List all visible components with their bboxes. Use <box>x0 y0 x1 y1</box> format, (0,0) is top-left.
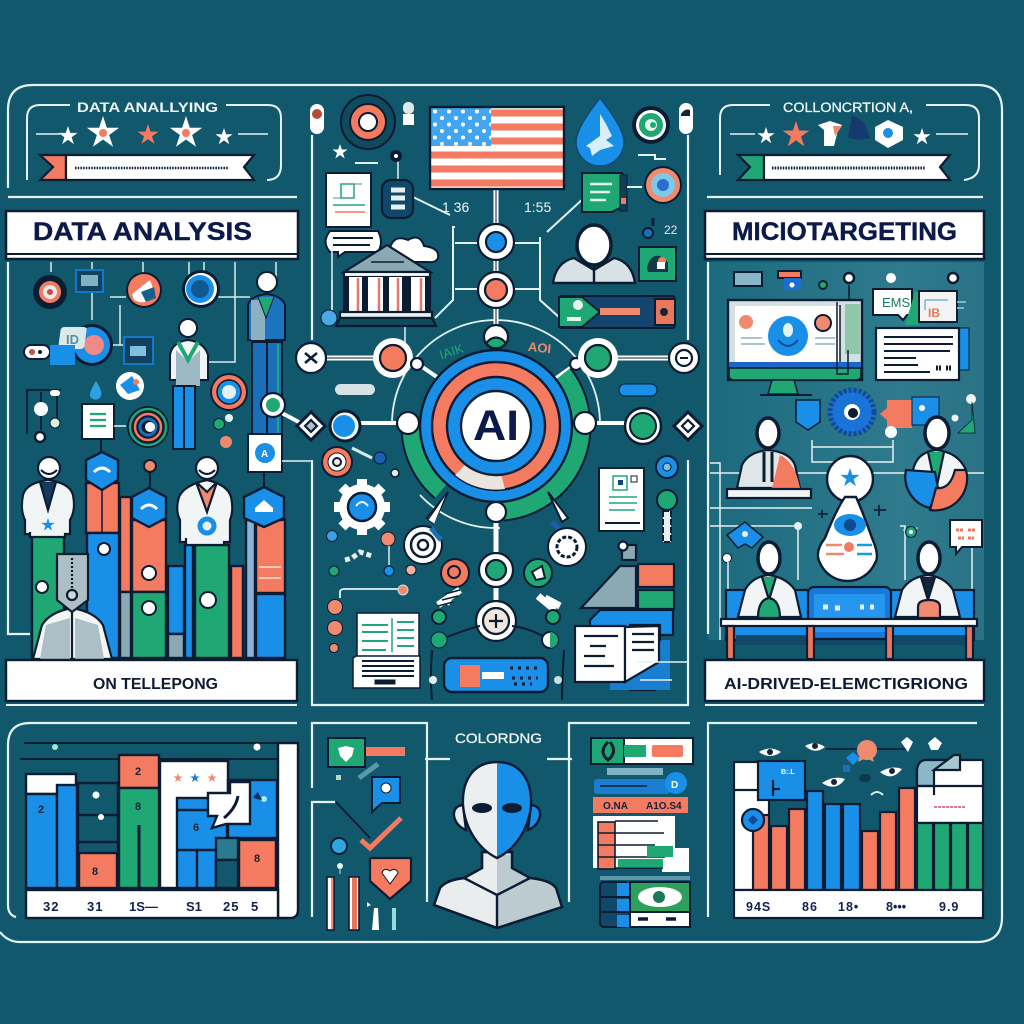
coral bars 2 <box>862 831 878 890</box>
ears <box>454 805 466 830</box>
icon: coral disc <box>126 272 162 308</box>
header frame <box>720 105 979 180</box>
chart stars <box>173 773 267 802</box>
icon: EMS bubble <box>873 289 919 325</box>
icon: A box <box>248 434 312 472</box>
label: AI-DRIVED-ELEMCTIGRIONG <box>705 660 984 705</box>
icon: slider row <box>594 768 687 794</box>
icon: puzzle block <box>880 397 939 438</box>
icon: green money tag <box>591 738 693 764</box>
icon: green photo <box>639 247 676 281</box>
panel: right microtargeting tinted background <box>708 262 984 640</box>
chart label strip <box>26 890 278 918</box>
icon: report document <box>353 613 420 688</box>
header title: DATA ANALLYING <box>77 100 218 115</box>
label: ON TELLEPONG: ON TELLEPONG <box>93 676 218 693</box>
icon: star balloon <box>827 456 873 502</box>
icon: eye ring <box>341 95 395 149</box>
chart glyphs: 6 <box>193 822 199 834</box>
shoulders <box>434 852 562 928</box>
icon: dash <box>638 155 666 159</box>
seated person right <box>895 542 960 618</box>
icon: screen <box>124 337 153 364</box>
white right column <box>278 743 298 918</box>
hub green ring <box>411 374 581 511</box>
title: DATA ANALYSIS: DATA ANALYSIS <box>33 218 252 246</box>
title: MICIOTARGETING: MICIOTARGETING <box>732 218 957 246</box>
eyes <box>472 803 492 813</box>
table with seated people <box>721 542 977 659</box>
pills by hub <box>335 384 657 396</box>
figure: person with pie <box>905 417 967 510</box>
icon: blue gear <box>830 390 874 434</box>
title: MICIOTARGETING <box>705 211 984 259</box>
icon: callout and cloud <box>326 231 438 262</box>
icon: target <box>33 275 67 309</box>
bar chart: bottom left: 1S— <box>129 899 158 914</box>
icon: right pill <box>679 103 693 134</box>
blue sign: B:.L <box>781 769 795 776</box>
bar chart: bottom left: 32 <box>43 899 59 914</box>
chart glyphs: 2 <box>135 766 141 778</box>
figure: AI head bust <box>434 762 562 928</box>
chart glyphs <box>38 766 260 878</box>
icon: blue ball <box>321 235 337 326</box>
white left column <box>734 762 769 890</box>
icon: list table <box>593 816 689 872</box>
label: ON TELLEPONG <box>6 660 297 705</box>
node icons row 2 <box>297 408 702 444</box>
icon: dot and label 22: 22 <box>664 223 678 237</box>
header ribbon <box>738 155 950 180</box>
bar chart: bottom right: 86 <box>802 900 818 914</box>
icon: tablet <box>58 327 87 349</box>
icon: blue disc <box>182 270 220 308</box>
icon: spiral <box>127 406 169 448</box>
icon: thin bars <box>327 877 394 930</box>
icon: blue tag lower <box>722 522 763 590</box>
bar chart: bottom right: 9.9 <box>939 900 959 914</box>
connector: bracket to device <box>429 626 564 700</box>
panel: centre network <box>296 95 702 700</box>
icon: top small tiles <box>734 271 827 290</box>
chart glyphs: 8 <box>135 801 141 813</box>
label: time left: 1 36 <box>442 199 469 215</box>
bar chart: bottom right <box>734 737 983 918</box>
label: arc text left: IAIK <box>437 340 466 362</box>
icon: small pin <box>337 863 343 874</box>
figure: scientist left <box>22 457 74 537</box>
chart top lines <box>20 743 278 759</box>
icon: chat bubble <box>24 345 75 365</box>
seat backs <box>726 590 974 645</box>
icon: coral dots and lead <box>328 585 408 652</box>
bar chart: bottom left <box>20 743 298 918</box>
seated person left <box>738 542 801 618</box>
icon: small dots <box>214 414 233 448</box>
bar chart: left figures and columns <box>32 440 285 658</box>
blue bars <box>807 791 823 890</box>
icon: scattered dots <box>326 530 416 576</box>
figure: bust outline <box>553 225 635 283</box>
icon: arrow bar <box>559 296 675 328</box>
icon: tablet: ID <box>66 332 79 347</box>
icon: blue map pin bubble <box>372 777 400 812</box>
icon: small speech card <box>950 520 982 554</box>
heading: COLORDNG <box>455 731 542 746</box>
floating eye icons <box>759 737 942 795</box>
figure: standing man blue <box>248 272 285 449</box>
panel: right header banner <box>720 100 979 180</box>
blue sign <box>758 761 805 800</box>
icon: stacked house chart <box>575 542 688 690</box>
panel: data analysis icons <box>24 262 312 472</box>
header stars <box>36 116 268 147</box>
icon: blue device <box>444 658 548 692</box>
header ribbon <box>40 155 254 180</box>
icon: water drop <box>576 98 624 166</box>
icon: capitol temple <box>336 245 436 326</box>
icon: small pill <box>403 102 414 125</box>
icon: star and dash <box>332 144 378 163</box>
icon: device <box>76 270 103 292</box>
table legs <box>727 626 973 659</box>
icon: coral pin <box>432 559 469 624</box>
node: target lower <box>476 601 516 641</box>
panel: microtargeting icons <box>710 271 984 659</box>
panel: left header banner <box>27 100 281 180</box>
screen centre <box>808 587 891 639</box>
chart hexagons <box>86 440 284 527</box>
icon: dot and label 22 <box>643 218 678 238</box>
figure: scientist center <box>177 457 232 545</box>
icon: slider row: D <box>671 780 678 791</box>
bar chart: bottom left: 31 <box>87 899 103 914</box>
bar chart: bottom left: 25 <box>223 899 239 914</box>
icon: top-left pill <box>310 104 324 134</box>
header stars <box>730 115 968 148</box>
face <box>463 762 497 858</box>
label: coral strip: A1O.S4 <box>646 801 682 812</box>
icon: IPB card <box>919 291 966 322</box>
icon: pen right <box>548 492 586 566</box>
nodes on spine <box>478 224 514 349</box>
figure: standing man <box>170 319 208 449</box>
icon: check mark <box>336 802 401 848</box>
label: time right: 1:55 <box>524 199 551 215</box>
icon: green target <box>632 106 670 144</box>
node: white lower <box>486 502 506 522</box>
icon: top node <box>794 522 918 538</box>
icon: green chat <box>582 173 627 212</box>
chart label strip <box>734 890 983 918</box>
icon: panel dots <box>844 273 958 300</box>
icon: money block <box>600 876 690 927</box>
icon: swirl <box>71 324 113 366</box>
chart glyphs: 2 <box>38 804 44 816</box>
title: DATA ANALYSIS <box>6 211 298 259</box>
icon: node dot and server <box>382 150 413 218</box>
node: green lower <box>479 553 513 587</box>
label: AI-DRIVED-ELEMCTIGRIONG: AI-DRIVED-ELEMCTIGRIONG <box>724 676 968 693</box>
coral bars <box>753 815 769 890</box>
icon: pen left <box>404 492 448 564</box>
icon: blue dot and green stack <box>656 456 678 542</box>
figure: podium speaker <box>727 418 811 498</box>
centre AI hub <box>411 350 581 511</box>
bar chart: bottom left: S1 <box>186 899 202 914</box>
icon: blueprint doc <box>326 173 371 227</box>
icon: IPB card: IB <box>928 306 940 320</box>
icon: EMS bubble: EMS <box>882 295 910 310</box>
icon: right document <box>599 468 644 531</box>
icon: droplet robot <box>818 497 886 581</box>
chart dots <box>36 460 216 615</box>
icon: coral target right <box>627 166 682 204</box>
panel: coloring centre bottom <box>327 731 693 930</box>
icon: text card <box>876 328 969 380</box>
label: coral strip <box>593 797 688 813</box>
icon: gear badge <box>116 372 144 400</box>
icon: white gear <box>334 479 390 535</box>
icon: blue ball <box>331 838 347 854</box>
bar chart: bottom right: 94S <box>746 900 771 914</box>
connector lines <box>332 197 600 528</box>
bar chart: bottom right: 18• <box>838 900 859 914</box>
icon: flag <box>430 107 564 189</box>
label: arc text right: AOI <box>527 339 552 356</box>
node: white green <box>261 393 310 428</box>
icon: small green bar and dots <box>952 394 976 433</box>
header title: COLLONCRTION A, <box>783 100 913 115</box>
bar chart: bottom left: 5 <box>251 899 258 914</box>
icon: monitor <box>728 300 862 395</box>
green bars and paper <box>917 755 983 890</box>
icon: bracket with circles <box>27 390 61 442</box>
chart callout <box>208 782 250 828</box>
ring side lines <box>316 358 680 423</box>
icon: drop <box>90 381 101 400</box>
header frame <box>27 105 281 180</box>
icon: green pin <box>524 559 560 624</box>
chart glyphs: 8 <box>254 853 260 865</box>
blue badge <box>742 809 764 831</box>
icon: A box: A <box>261 449 268 460</box>
connector lines <box>710 440 984 640</box>
icon: document <box>82 404 126 439</box>
icon: coral D badge <box>210 373 248 411</box>
icon: heart shield <box>370 858 411 899</box>
hub label AI: AI <box>473 402 519 450</box>
bar chart: bottom right: 8••• <box>886 900 906 914</box>
node icons row 1 <box>296 338 699 378</box>
icon: green card and bar <box>328 738 405 780</box>
table top <box>721 619 977 626</box>
label: coral strip: O.NA <box>603 801 628 812</box>
chart glyphs: 8 <box>92 866 98 878</box>
icon: coral target lower left <box>321 446 399 478</box>
icon: blue tag <box>796 400 820 430</box>
figure: zipper head man <box>33 554 112 659</box>
